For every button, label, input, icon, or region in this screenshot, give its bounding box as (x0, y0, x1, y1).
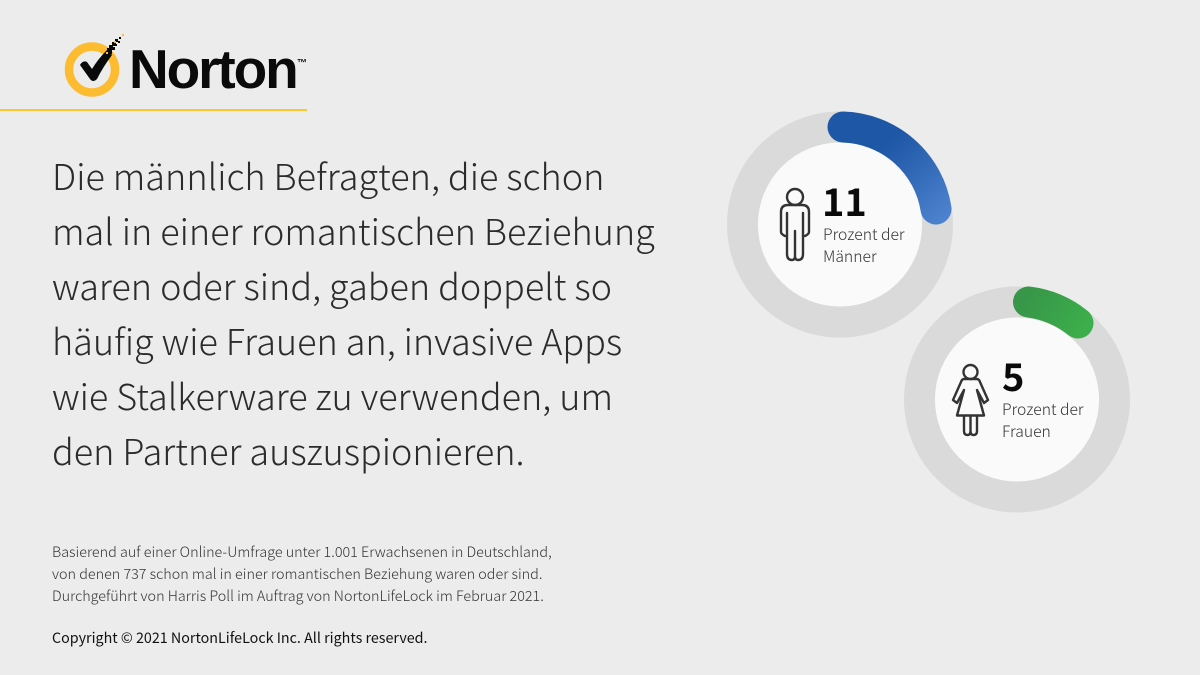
trademark: ™ (297, 58, 307, 69)
main statement text: den Partner auszuspionieren. (52, 424, 525, 476)
main statement text (52, 149, 655, 476)
value 5: 5 (1002, 347, 1024, 402)
label men (823, 222, 905, 267)
label women: Prozent der (1002, 397, 1084, 420)
main statement text: häufig wie Frauen an, invasive Apps (52, 314, 622, 366)
donut track (742, 127, 938, 322)
green arc (1028, 302, 1078, 323)
value 11: 11 (822, 172, 867, 227)
main statement text: waren oder sind, gaben doppelt so (52, 259, 612, 311)
label women: Frauen (1002, 419, 1051, 442)
main statement text: Die männlich Befragten, die schon (52, 149, 604, 201)
footnote: survey method (52, 541, 552, 606)
footnote: survey method: Durchgeführt von Harris Poll im Auftrag von NortonLifeLock im Februar 2021. (52, 585, 544, 606)
main statement text: wie Stalkerware zu verwenden, um (52, 369, 613, 421)
logo underline (0, 109, 307, 111)
footnote: survey method: Basierend auf einer Online-Umfrage unter 1.001 Erwachsenen in Deutschland, (52, 541, 552, 562)
label men: Prozent der (823, 222, 905, 245)
blue arc (843, 127, 936, 209)
donut chart: women 5 percent (920, 302, 1114, 497)
donut centre (758, 142, 922, 306)
label women (1002, 397, 1084, 442)
icon: man (781, 189, 809, 260)
donut track (920, 302, 1114, 497)
donut chart: men 11 percent (742, 127, 938, 322)
logo wordmark: Norton (129, 38, 297, 100)
donut centre (935, 318, 1099, 482)
icon: woman (953, 365, 988, 435)
main statement text: mal in einer romantischen Beziehung (52, 204, 655, 256)
copyright: Copyright © 2021 NortonLifeLock Inc. All rights reserved. (52, 627, 428, 648)
label men: Männer (823, 244, 877, 267)
icon: check mark (80, 50, 112, 81)
footnote: survey method: von denen 737 schon mal in einer romantischen Beziehung waren oder sind. (52, 563, 542, 584)
logo: Norton (69, 34, 307, 100)
icon: yellow ring (69, 46, 115, 92)
icon: pixel trail (106, 34, 124, 54)
